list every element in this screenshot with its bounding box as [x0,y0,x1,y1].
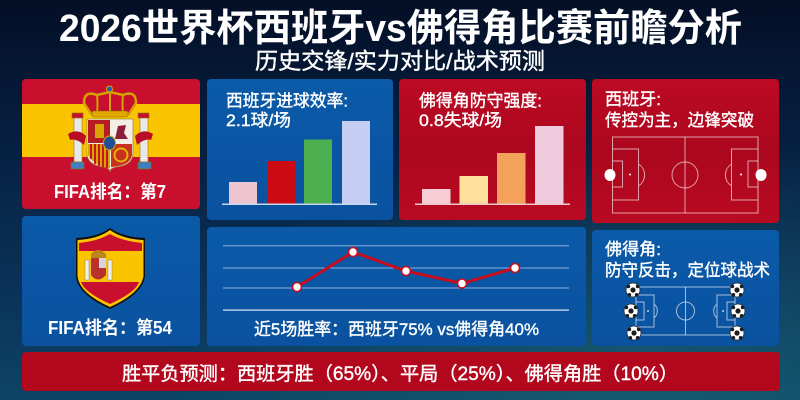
ball right [756,169,766,181]
line chart [223,246,569,311]
panel: Spain scoring efficiency [207,79,393,220]
heading: 佛得角: [605,240,661,259]
icon: shield crest [76,228,145,309]
panel: Cape Verde ranking [22,216,200,346]
panel: Spain tactics [592,79,779,223]
heading: 佛得角防守强度: [419,92,542,110]
heading: 防守反击，定位球战术 [605,261,770,280]
subtitle: 历史交锋/实力对比/战术预测 [255,49,545,74]
heading: 0.8失球/场 [419,111,502,130]
title: 2026世界杯西班牙vs佛得角比赛前瞻分析 [59,8,742,50]
panel: Spain flag and ranking [22,79,200,209]
icon: Spanish coat of arms [68,86,153,172]
ranking: Cape Verde: FIFA排名：第54 [48,317,172,338]
panel: Cape Verde defence strength [399,79,586,220]
prediction text: 胜平负预测：西班牙胜（65%）、平局（25%）、佛得角胜（10%） [122,363,678,385]
panel: recent win rate line chart [207,227,586,346]
panel: match outcome prediction [22,352,780,391]
heading: 2.1球/场 [226,111,291,130]
bar chart [415,126,570,205]
caption: 近5场胜率：西班牙75% vs佛得角40% [254,320,539,339]
pitch diagram with footballs [624,283,745,340]
heading: 传控为主，边锋突破 [605,111,754,130]
pitch diagram [604,137,766,213]
flag background [22,79,200,209]
heading: 西班牙: [605,90,661,109]
panel: Cape Verde tactics [592,230,779,346]
ball left [604,169,616,181]
ranking: Spain: FIFA排名：第7 [54,181,166,202]
bar chart [222,121,377,205]
heading: 西班牙进球效率: [226,92,348,110]
